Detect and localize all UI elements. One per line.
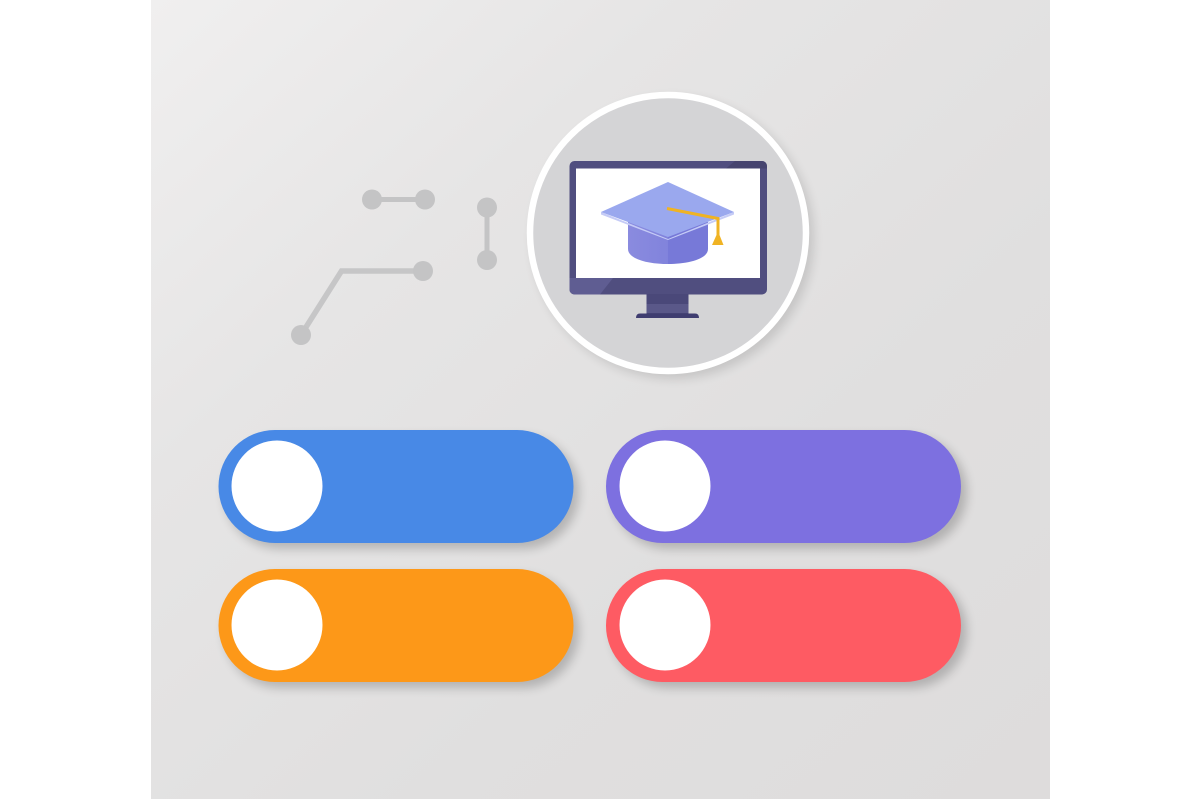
monitor frame highlights bbox=[570, 161, 767, 294]
monitor stand bbox=[636, 294, 699, 318]
pill: blue bbox=[218, 430, 579, 549]
cap board bbox=[601, 182, 734, 237]
graduation cap bbox=[601, 182, 734, 264]
circle shadow bbox=[532, 97, 814, 379]
pill: red bbox=[606, 569, 967, 688]
monitor screen bbox=[576, 168, 760, 278]
connector: horizontal node link bbox=[362, 190, 435, 210]
background panel bbox=[151, 0, 1050, 799]
monitor frame bbox=[570, 161, 767, 294]
cap board edge bbox=[601, 212, 734, 240]
connector: vertical node link bbox=[477, 198, 497, 270]
pill: orange bbox=[218, 569, 579, 688]
cap base bbox=[628, 222, 708, 264]
cap tassel bbox=[667, 208, 724, 245]
circle badge bbox=[530, 95, 806, 371]
connector: bent node link bbox=[291, 261, 433, 345]
icon: monitor with graduation cap in circle bbox=[530, 95, 814, 379]
pill: purple bbox=[606, 430, 967, 549]
